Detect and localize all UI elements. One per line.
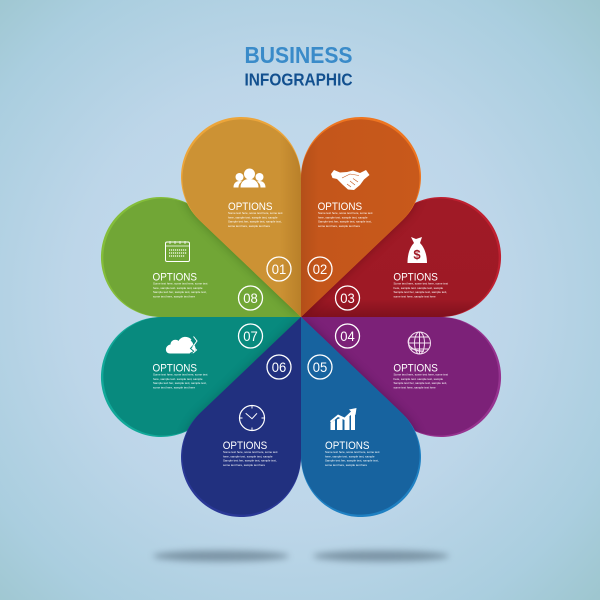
text block 06: Some text here, some text here, some text bbox=[223, 450, 278, 454]
text block 04: here, sample text. sample text, sample bbox=[394, 377, 443, 381]
title: INFOGRAPHIC bbox=[244, 70, 353, 90]
title bbox=[244, 42, 353, 90]
text block 01: Some text here, some text here, some text bbox=[228, 211, 283, 215]
number badge 06: 06 bbox=[272, 359, 286, 375]
text block 07: here, sample text. sample text, sample bbox=[153, 377, 203, 381]
text block 07: Some text here, some text here, some text bbox=[153, 372, 208, 376]
icon: money bag: $ bbox=[413, 247, 421, 262]
text block 02: here, sample text. sample text, sample bbox=[318, 215, 368, 219]
text block 03 bbox=[393, 272, 448, 298]
text block 01 bbox=[228, 201, 283, 228]
text block 05: Some text here, some text here, some text bbox=[325, 450, 380, 454]
icon: people bbox=[234, 168, 266, 188]
number badge 05 bbox=[308, 355, 332, 379]
text block 07: some text here, sample text here bbox=[153, 385, 195, 389]
petal 04 shape: purple bbox=[301, 317, 502, 437]
text block 07: Sample text her, sample text, sample text, bbox=[153, 381, 207, 385]
number badge 05: 05 bbox=[313, 359, 327, 375]
text block 07: OPTIONS bbox=[152, 362, 197, 374]
title: BUSINESS bbox=[244, 42, 352, 68]
text block 06: here, sample text. sample text, sample bbox=[223, 454, 273, 458]
ground shadow left bbox=[153, 550, 289, 562]
icon: clock bbox=[240, 406, 264, 430]
text block 03: here, sample text. sample text, sample bbox=[394, 286, 443, 290]
text block 05 bbox=[325, 440, 380, 467]
text block 06: OPTIONS bbox=[223, 440, 267, 452]
text block 01: Sample text her, sample text, sample text, bbox=[228, 220, 282, 224]
icon: growth chart bbox=[330, 408, 356, 430]
text block 02: Sample text her, sample text, sample text, bbox=[318, 220, 372, 224]
text block 08 bbox=[152, 272, 208, 298]
text block 05: here, sample text. sample text, sample bbox=[325, 454, 375, 458]
icon: handshake bbox=[331, 170, 370, 190]
text block 03: some text here, sample text here bbox=[394, 294, 436, 298]
number badge 06 bbox=[267, 355, 291, 379]
petal 01 shape: amber bbox=[181, 117, 301, 317]
text block 05: some text here, sample text here bbox=[325, 463, 367, 467]
number badge 08 bbox=[238, 286, 262, 310]
icon: cloud bbox=[166, 336, 197, 354]
text block 06: some text here, sample text here bbox=[223, 463, 265, 467]
petal 06 shape: navy bbox=[181, 317, 301, 517]
number badge 01: 01 bbox=[272, 261, 286, 277]
text block 05: OPTIONS bbox=[325, 440, 370, 452]
text block 02: OPTIONS bbox=[318, 201, 362, 213]
text block 02: some text here, sample text here bbox=[318, 224, 360, 228]
text block 04: OPTIONS bbox=[393, 362, 438, 374]
text block 04: Some text here, some text here, some text bbox=[394, 372, 448, 376]
petal 08 shape: green bbox=[100, 197, 301, 317]
number badge 03: 03 bbox=[340, 290, 355, 306]
text block 03: Some text here, some text here, some text bbox=[394, 282, 448, 286]
text block 02: Some text here, some text here, some text bbox=[318, 211, 373, 215]
number badge 02 bbox=[308, 257, 332, 281]
number badge 04 bbox=[336, 324, 360, 348]
number badge 08: 08 bbox=[243, 290, 258, 306]
petal 02 shape: orange bbox=[301, 117, 421, 317]
text block 02 bbox=[318, 201, 373, 228]
text block 08: some text here, sample text here bbox=[153, 294, 195, 298]
ground shadow right bbox=[313, 550, 449, 562]
text block 01: some text here, sample text here bbox=[228, 224, 270, 228]
petal 03 shape: red bbox=[301, 197, 502, 317]
number badge 07: 07 bbox=[243, 328, 258, 344]
text block 06 bbox=[223, 440, 278, 467]
text block 08: here, sample text. sample text, sample bbox=[153, 286, 203, 290]
number badge 02: 02 bbox=[313, 261, 327, 277]
text block 08: Some text here, some text here, some text bbox=[153, 282, 208, 286]
text block 04: some text here, sample text here bbox=[394, 385, 436, 389]
text block 03: Sample text her, sample text, sample text, bbox=[394, 290, 447, 294]
text block 08: OPTIONS bbox=[152, 272, 197, 284]
icon: money bag bbox=[408, 237, 427, 263]
icon: calendar bbox=[166, 241, 190, 262]
text block 07 bbox=[152, 362, 208, 389]
text block 06: Sample text her, sample text, sample text, bbox=[223, 459, 277, 463]
number badge 01 bbox=[267, 257, 291, 281]
text block 08: Sample text her, sample text, sample text, bbox=[153, 290, 207, 294]
icon: globe bbox=[408, 332, 430, 354]
text block 04: Sample text her, sample text, sample text, bbox=[394, 381, 447, 385]
text block 01: OPTIONS bbox=[228, 201, 272, 213]
number badge 04: 04 bbox=[340, 328, 355, 344]
number badge 03 bbox=[336, 286, 360, 310]
text block 04 bbox=[393, 362, 448, 389]
text block 03: OPTIONS bbox=[393, 272, 438, 284]
petal 07 shape: teal bbox=[100, 317, 301, 437]
number badge 07 bbox=[238, 324, 262, 348]
petal 05 shape: blue bbox=[301, 317, 421, 517]
text block 01: here, sample text. sample text, sample bbox=[228, 215, 278, 219]
text block 05: Sample text her, sample text, sample text, bbox=[325, 459, 379, 463]
